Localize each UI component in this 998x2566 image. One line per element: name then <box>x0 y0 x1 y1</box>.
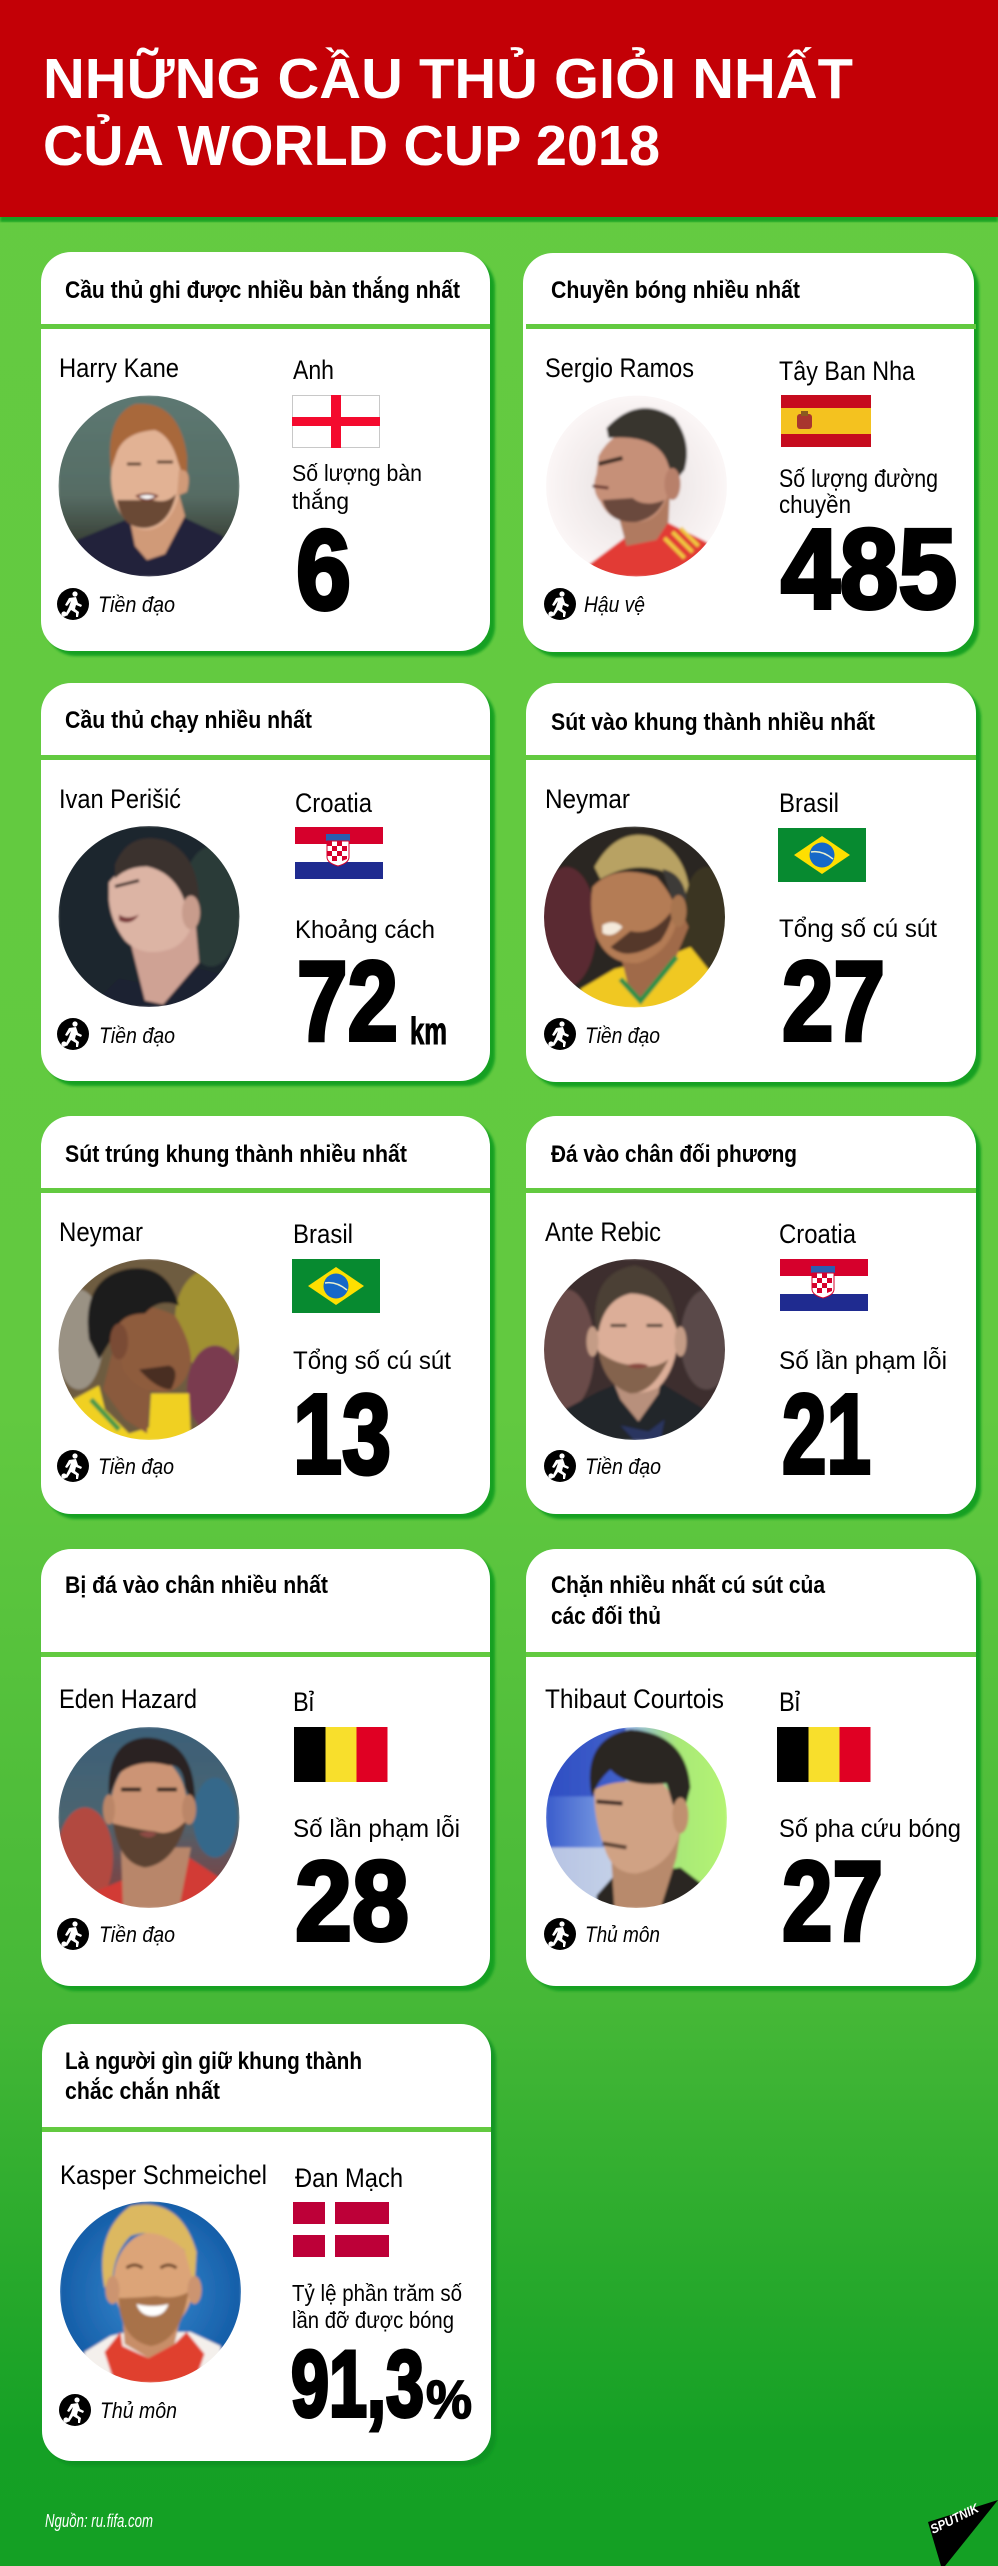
country: Đan Mạch <box>295 2163 403 2193</box>
stat label: thắng <box>292 488 349 514</box>
title <box>43 46 853 178</box>
flag: Belgium <box>777 1727 870 1782</box>
heading <box>65 2048 362 2105</box>
position: Tiền đạo <box>585 1023 660 1048</box>
flag: England <box>292 395 380 448</box>
logo: Sputnik: SPUTNIK <box>928 2500 982 2537</box>
panel: most saves <box>526 1549 981 1991</box>
flag: Denmark <box>293 2202 389 2257</box>
position: Tiền đạo <box>99 1023 175 1048</box>
country: Anh <box>293 355 334 385</box>
panel: most passes <box>523 253 979 657</box>
stat label: Số lần phạm lỗi <box>779 1346 947 1375</box>
source: Nguồn: ru.fifa.com <box>45 2511 153 2531</box>
panel: most goals <box>41 252 495 656</box>
player name: Sergio Ramos <box>545 353 694 383</box>
player name: Eden Hazard <box>59 1684 197 1714</box>
stat label <box>779 465 938 519</box>
icon: player <box>59 2394 91 2426</box>
icon: player <box>544 1450 576 1482</box>
heading: Bị đá vào chân nhiều nhất <box>65 1572 328 1599</box>
stat label <box>292 2280 462 2333</box>
player name: Harry Kane <box>59 353 179 383</box>
value: 6 <box>296 507 351 633</box>
position: Tiền đạo <box>585 1454 661 1479</box>
country: Croatia <box>295 788 373 818</box>
title: CỦA WORLD CUP 2018 <box>43 113 660 178</box>
icon: player <box>57 1450 89 1482</box>
heading: Sút trúng khung thành nhiều nhất <box>65 1141 407 1168</box>
player name: Ivan Perišić <box>59 784 181 814</box>
flag: Croatia <box>780 1259 868 1311</box>
country: Croatia <box>779 1219 857 1249</box>
value: 27 <box>782 1838 883 1964</box>
value: 27 <box>782 938 885 1064</box>
panel: best goalkeeper <box>42 2024 496 2466</box>
value: 72 <box>297 938 398 1064</box>
icon: player <box>57 588 89 620</box>
stat label: Tỷ lệ phần trăm số <box>292 2280 462 2306</box>
logo: Sputnik <box>928 2500 998 2566</box>
player name: Ante Rebic <box>545 1217 661 1247</box>
heading: Là người gìn giữ khung thành <box>65 2048 362 2075</box>
icon: player <box>544 1918 576 1950</box>
position: Tiền đạo <box>98 1454 174 1479</box>
panel: fouls committed <box>526 1116 981 1519</box>
portrait: Sergio Ramos <box>546 395 732 577</box>
heading: Chuyền bóng nhiều nhất <box>551 277 800 304</box>
flag: Brazil <box>292 1259 380 1313</box>
value: 13 <box>293 1371 391 1497</box>
icon: player <box>57 1918 89 1950</box>
value: 28 <box>295 1838 409 1964</box>
position: Thủ môn <box>585 1922 660 1947</box>
heading: Đá vào chân đối phương <box>551 1141 797 1168</box>
stat label: Số lần phạm lỗi <box>293 1814 460 1843</box>
position: Tiền đạo <box>99 1922 175 1947</box>
heading: Sút vào khung thành nhiều nhất <box>551 709 875 736</box>
portrait: Neymar <box>536 826 732 1008</box>
player name: Neymar <box>59 1217 143 1247</box>
stat label: Số lượng bàn <box>292 460 422 486</box>
title: NHỮNG CẦU THỦ GIỎI NHẤT <box>43 46 853 111</box>
icon: player <box>544 588 576 620</box>
flag: Croatia <box>295 827 383 879</box>
heading <box>551 1572 826 1630</box>
player name: Thibaut Courtois <box>545 1684 724 1714</box>
position: Thủ môn <box>100 2398 177 2423</box>
portrait: Harry Kane <box>58 395 240 577</box>
portrait: Eden Hazard <box>57 1726 240 1908</box>
heading: Cầu thủ ghi được nhiều bàn thắng nhất <box>65 276 460 304</box>
heading: Cầu thủ chạy nhiều nhất <box>65 707 312 734</box>
stat label: Tổng số cú sút <box>293 1347 451 1375</box>
stat label <box>292 460 422 514</box>
country: Brasil <box>293 1219 353 1249</box>
stat label: Số lượng đường <box>779 465 938 493</box>
portrait: Ivan Perisic <box>58 826 241 1008</box>
value: 485 <box>781 506 957 632</box>
portrait: Neymar profile <box>55 1258 243 1440</box>
player name: Kasper Schmeichel <box>60 2160 267 2190</box>
flag: Spain <box>781 395 871 447</box>
value: 21 <box>782 1371 871 1497</box>
stat label: Số pha cứu bóng <box>779 1815 961 1843</box>
position: Hậu vệ <box>584 592 645 617</box>
panel: most fouled <box>41 1549 495 1991</box>
country: Tây Ban Nha <box>779 356 916 386</box>
country: Bỉ <box>293 1687 314 1717</box>
stat label: chuyền <box>779 491 851 519</box>
stat label: Khoảng cách <box>295 916 435 944</box>
portrait: Ante Rebic <box>538 1258 732 1440</box>
heading: các đối thủ <box>551 1603 661 1630</box>
panel: most distance <box>41 683 495 1086</box>
portrait: Thibaut Courtois <box>546 1726 728 1910</box>
flag: Belgium <box>294 1727 388 1782</box>
value: km <box>410 1011 447 1053</box>
player name: Neymar <box>545 784 630 814</box>
stat label: lần đỡ được bóng <box>292 2307 454 2333</box>
icon: player <box>544 1018 576 1050</box>
flag: Brazil <box>778 828 866 882</box>
heading: chắc chắn nhất <box>65 2077 220 2105</box>
position: Tiền đạo <box>98 592 175 617</box>
country: Bỉ <box>779 1687 800 1717</box>
portrait: Kasper Schmeichel <box>60 2201 242 2383</box>
value: % <box>426 2370 472 2430</box>
icon: player <box>57 1018 89 1050</box>
panel: most shots on target <box>41 1116 495 1519</box>
stat label: Tổng số cú sút <box>779 915 937 943</box>
header banner <box>0 0 998 217</box>
heading: Chặn nhiều nhất cú sút của <box>551 1572 826 1599</box>
country: Brasil <box>779 788 839 818</box>
value: 91,3 <box>291 2331 424 2436</box>
panel: most shots <box>526 683 981 1087</box>
